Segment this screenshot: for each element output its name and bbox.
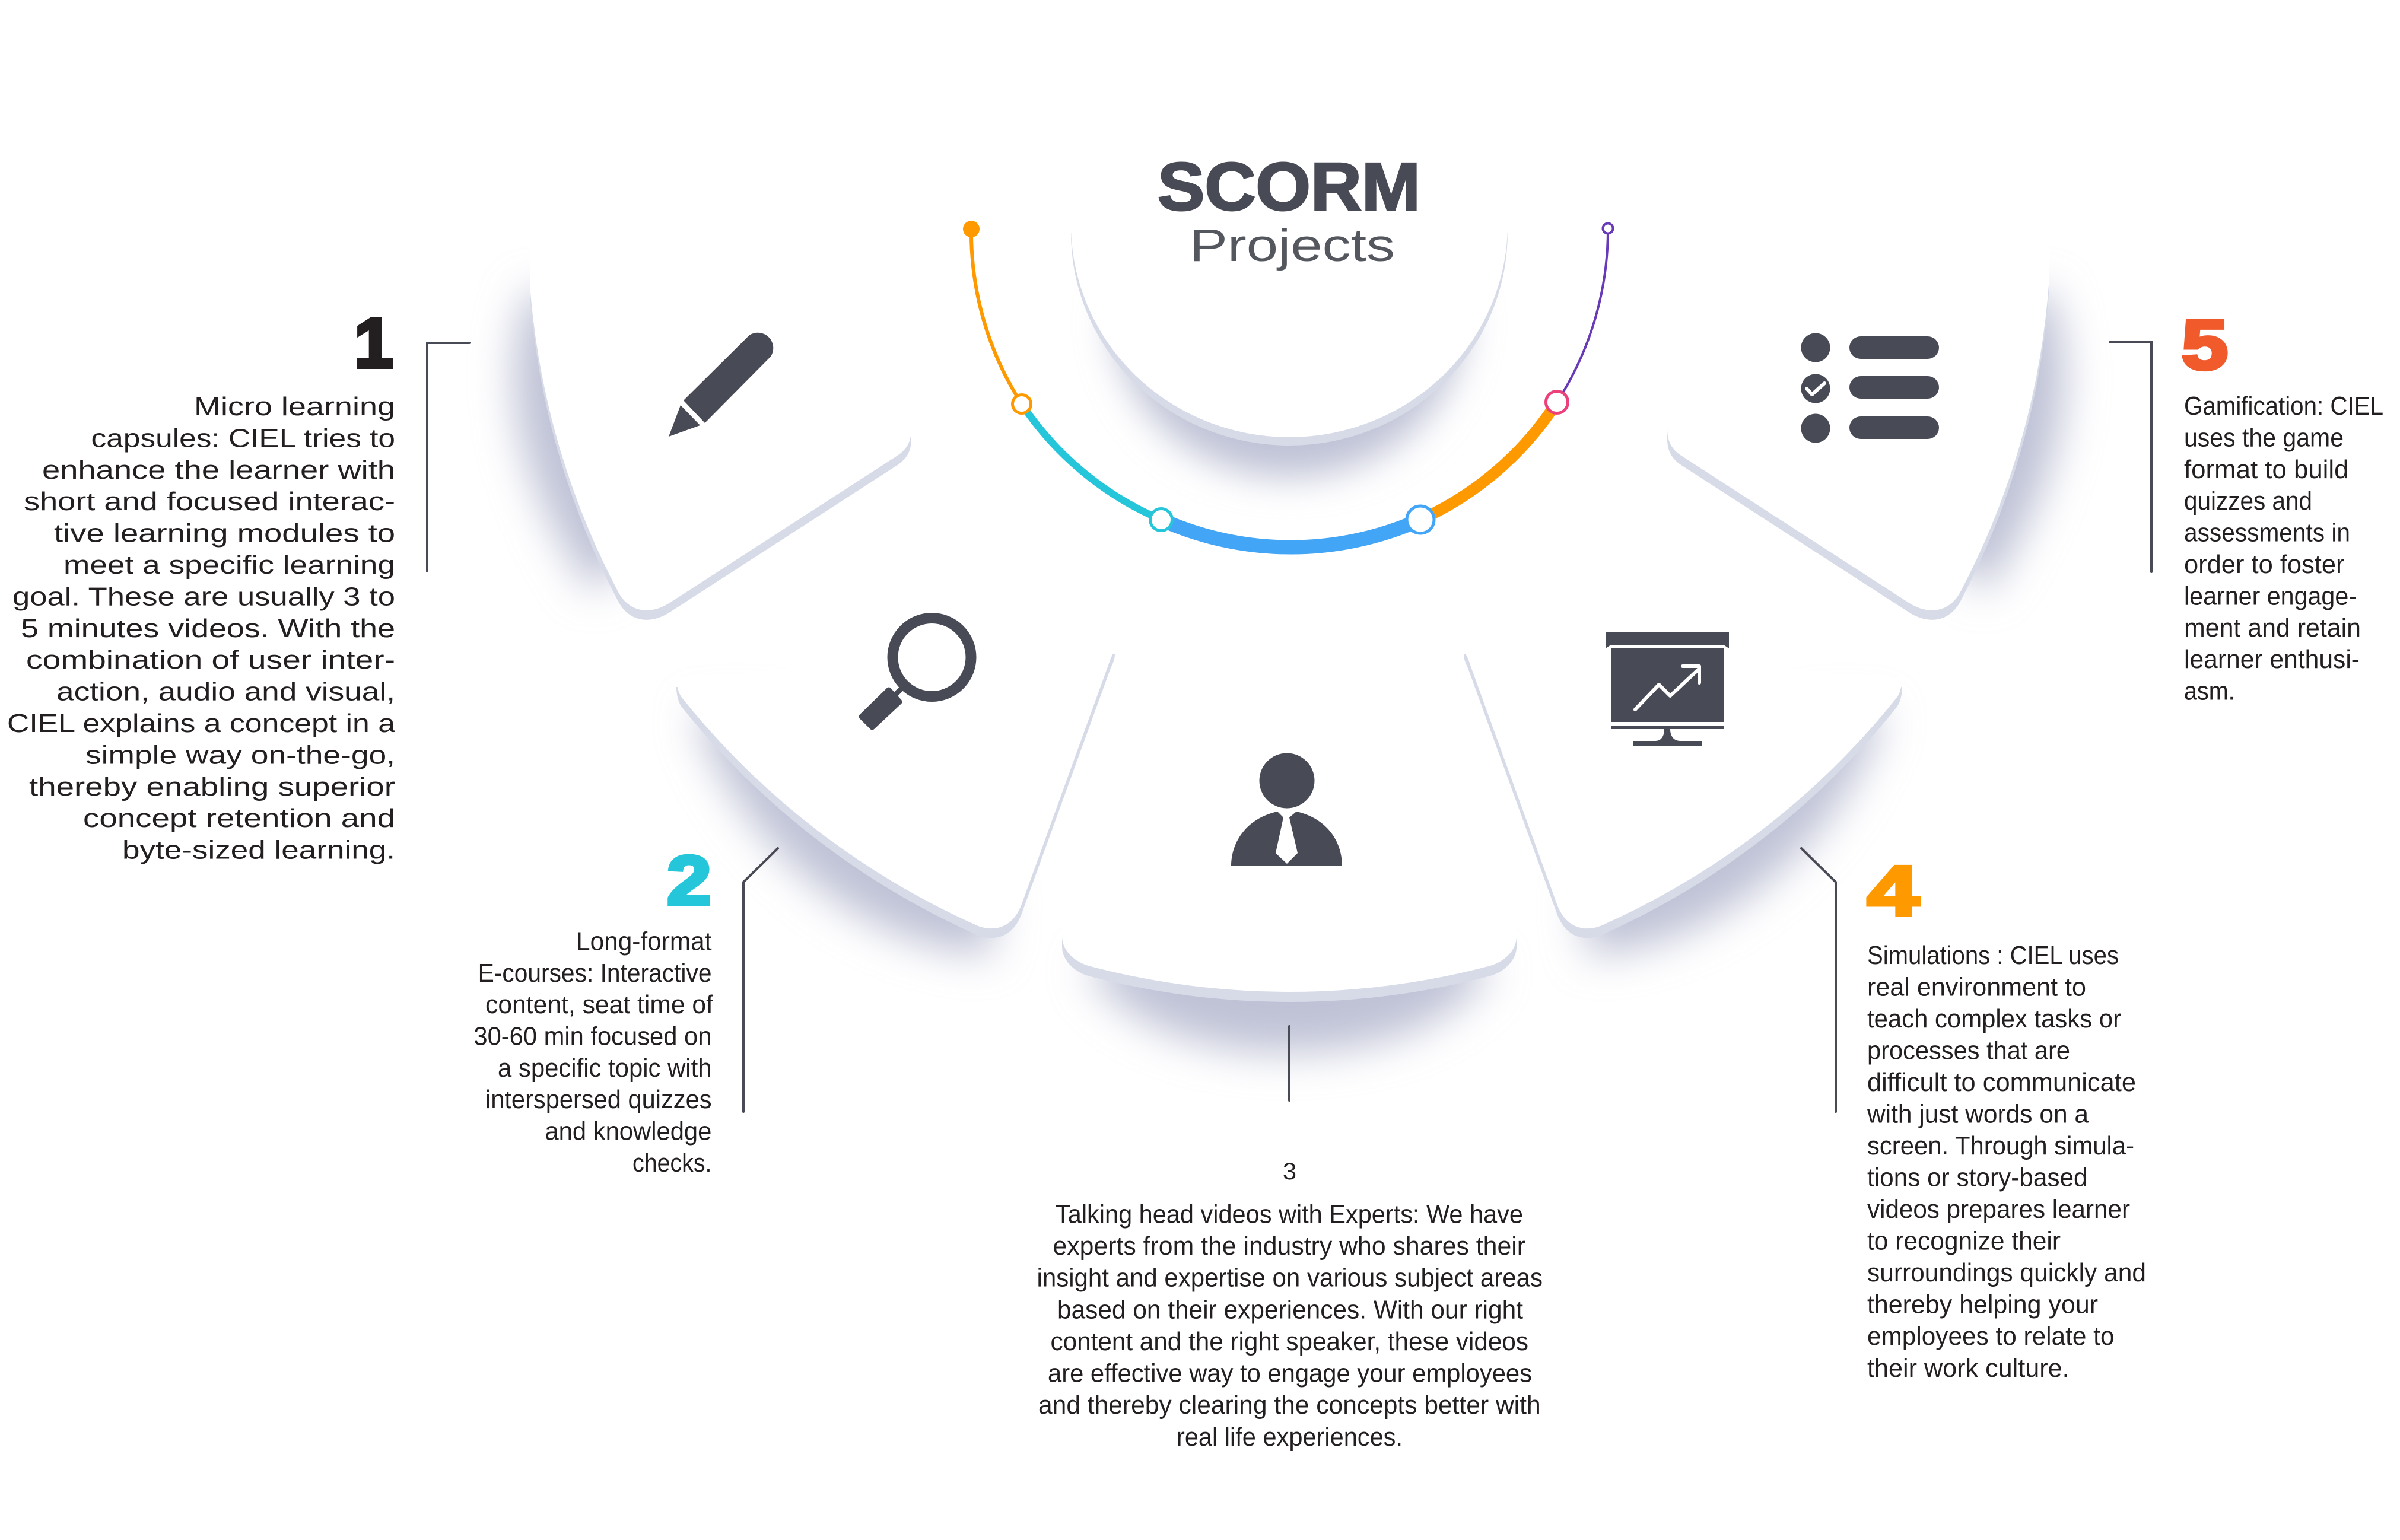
text block 2: a specific topic with — [498, 1054, 712, 1083]
text block 1: byte-sized learning. — [122, 836, 395, 865]
text block 2: Long-format — [576, 927, 712, 956]
text block 1: capsules: CIEL tries to — [91, 424, 395, 453]
text block 1: short and focused interac- — [24, 487, 395, 516]
text block 3: Talking head videos with Experts: We have — [1056, 1199, 1523, 1229]
text block 4: teach complex tasks or — [1867, 1004, 2121, 1033]
panel 4: presentation board — [1464, 632, 1902, 938]
text block 4: employees to relate to — [1867, 1322, 2115, 1351]
title — [1158, 149, 1420, 271]
text block 2: 30-60 min focused on — [473, 1022, 711, 1051]
text block 2: content, seat time of — [485, 990, 714, 1019]
text block 4 — [1867, 941, 2146, 1383]
title: SCORM — [1158, 149, 1420, 225]
text block 3 — [1037, 1199, 1543, 1452]
number 3: 3 — [1283, 1159, 1296, 1185]
text block 5: learner enthusi- — [2184, 645, 2360, 674]
text block 4: Simulations : CIEL uses — [1867, 941, 2119, 970]
text block 3: experts from the industry who shares their — [1053, 1232, 1525, 1261]
text block 5: learner engage- — [2184, 581, 2357, 610]
text block 3: and thereby clearing the concepts better with — [1038, 1391, 1541, 1420]
connector 2 — [743, 848, 778, 1112]
text block 3: insight and expertise on various subject areas — [1037, 1264, 1543, 1293]
text block 1: 5 minutes videos. With the — [21, 614, 395, 643]
text block 1: tive learning modules to — [54, 519, 395, 548]
text block 4: their work culture. — [1867, 1354, 2070, 1383]
text block 4: to recognize their — [1867, 1227, 2061, 1255]
text block 1: thereby enabling superior — [29, 772, 395, 801]
text block 4: with just words on a — [1867, 1100, 2089, 1128]
text block 1: meet a specific learning — [63, 551, 395, 580]
connector 1 — [427, 343, 469, 571]
center circle — [1071, 224, 1508, 446]
number 2: 2 — [667, 842, 711, 920]
text block 5 — [2184, 392, 2383, 706]
icon: magnifier — [862, 618, 971, 727]
number 4: 4 — [1867, 852, 1919, 930]
icon: checklist — [1801, 333, 1939, 443]
panel 3: person — [1062, 593, 1517, 1002]
text block 1: simple way on-the-go, — [85, 740, 395, 769]
text block 4: surroundings quickly and — [1867, 1258, 2146, 1287]
panel 2: magnifier — [676, 618, 1115, 938]
text block 5: quizzes and — [2184, 486, 2312, 516]
text block 5: ment and retain — [2184, 613, 2361, 642]
text block 1: CIEL explains a concept in a — [7, 709, 396, 738]
text block 4: tions or story-based — [1867, 1163, 2088, 1192]
text block 4: difficult to communicate — [1867, 1068, 2136, 1097]
text block 5: uses the game — [2184, 423, 2344, 452]
text block 2 — [473, 927, 714, 1178]
text block 5: Gamification: CIEL — [2184, 392, 2383, 421]
text block 4: thereby helping your — [1867, 1290, 2098, 1319]
connector 5 — [2110, 342, 2151, 572]
text block 3: content and the right speaker, these videos — [1050, 1327, 1528, 1356]
segmented progress arc — [963, 221, 1613, 548]
text block 1: combination of user inter- — [26, 645, 395, 674]
text block 4: screen. Through simula- — [1867, 1131, 2134, 1160]
text block 2: E-courses: Interactive — [478, 959, 712, 988]
text block 5: asm. — [2184, 677, 2235, 706]
text block 1: enhance the learner with — [42, 456, 395, 485]
number 1: 1 — [354, 304, 393, 383]
title: Projects — [1190, 220, 1395, 271]
text block 1: concept retention and — [83, 804, 395, 833]
icon: person with tie — [1231, 753, 1342, 866]
icon: pen — [669, 333, 773, 437]
text block 4: videos prepares learner — [1867, 1195, 2130, 1224]
panel 5: checklist — [1667, 178, 2049, 620]
text block 3: are effective way to engage your employees — [1048, 1358, 1532, 1388]
text block 5: format to build — [2184, 455, 2348, 484]
panel shadows — [514, 291, 2065, 1053]
text block 1 — [7, 392, 396, 865]
text block 3: real life experiences. — [1177, 1423, 1403, 1452]
text block 1: action, audio and visual, — [56, 677, 395, 707]
number 5: 5 — [2182, 306, 2228, 384]
text block 2: interspersed quizzes — [485, 1085, 712, 1114]
text block 5: assessments in — [2184, 518, 2350, 548]
icon: presentation board — [1606, 632, 1729, 746]
text block 5: order to foster — [2184, 550, 2345, 579]
connector 4 — [1801, 848, 1836, 1112]
text block 2: checks. — [632, 1148, 712, 1178]
text block 4: processes that are — [1867, 1036, 2070, 1065]
panel 1: pen — [530, 178, 911, 620]
text block 3: based on their experiences. With our right — [1057, 1295, 1523, 1324]
text block 4: real environment to — [1867, 973, 2086, 1001]
text block 1: Micro learning — [194, 392, 395, 421]
text block 2: and knowledge — [545, 1116, 711, 1146]
connector 3 — [1288, 1026, 1290, 1100]
text block 1: goal. These are usually 3 to — [12, 582, 395, 611]
